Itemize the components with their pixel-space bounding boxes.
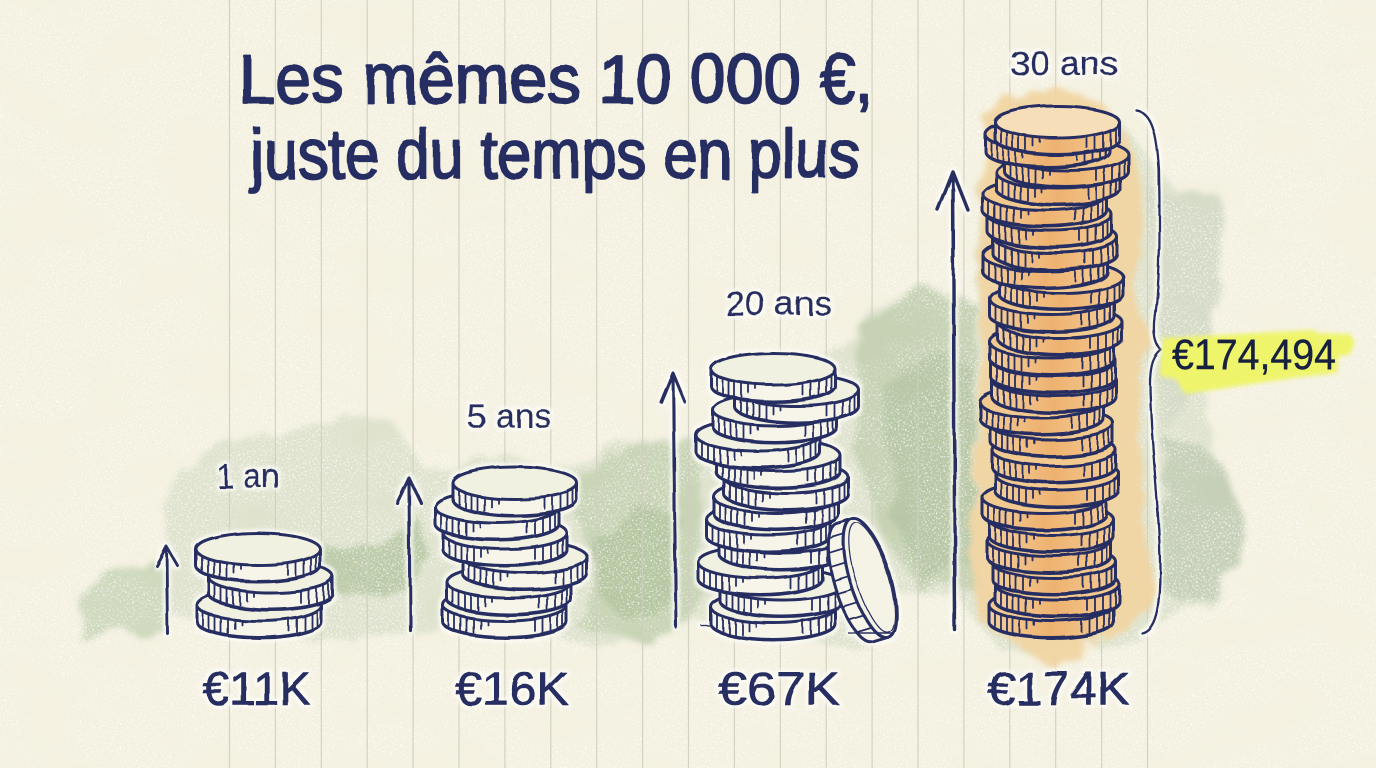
label: 1 an: 1 an [216, 458, 280, 496]
brace [1137, 111, 1161, 633]
value: 11K: €11K [203, 662, 311, 715]
value: 174K: €174K [988, 662, 1130, 715]
yellow highlight [1160, 330, 1355, 394]
leaning coin [817, 513, 907, 648]
value: 16K: €16K [455, 662, 569, 715]
coin stack: 30 years [980, 105, 1128, 638]
title [238, 40, 874, 193]
coin stack: 20 years [696, 352, 907, 648]
arrow: 5 years [397, 478, 421, 630]
vertical notebook lines [230, 0, 1148, 768]
watercolor wash: orange behind the 30-year stack [968, 88, 1158, 664]
label: 20 ans: 20 ans [725, 285, 832, 323]
title: Les mêmes 10 000 €, [238, 40, 874, 118]
arrow: 20 years [661, 373, 685, 627]
label: 5 ans: 5 ans [467, 398, 552, 436]
column: 5 years [397, 398, 587, 715]
watercolor wash: green growth hills [78, 120, 1250, 650]
coin stack: 5 years [435, 466, 587, 638]
column: 1 year [157, 458, 333, 715]
column: 20 years [661, 285, 907, 715]
ground strokes [701, 626, 892, 633]
callout: total amount [1160, 330, 1355, 394]
arrow: 30 years [938, 172, 968, 630]
amount: €174,494 [1172, 331, 1336, 379]
coin stack: 1 year [196, 532, 333, 638]
label: 30 ans: 30 ans [1010, 45, 1118, 83]
value: 67K: €67K [718, 662, 840, 715]
arrow: 1 year [157, 547, 178, 634]
title: juste du temps en plus [248, 115, 860, 193]
column: 30 years [938, 45, 1161, 715]
